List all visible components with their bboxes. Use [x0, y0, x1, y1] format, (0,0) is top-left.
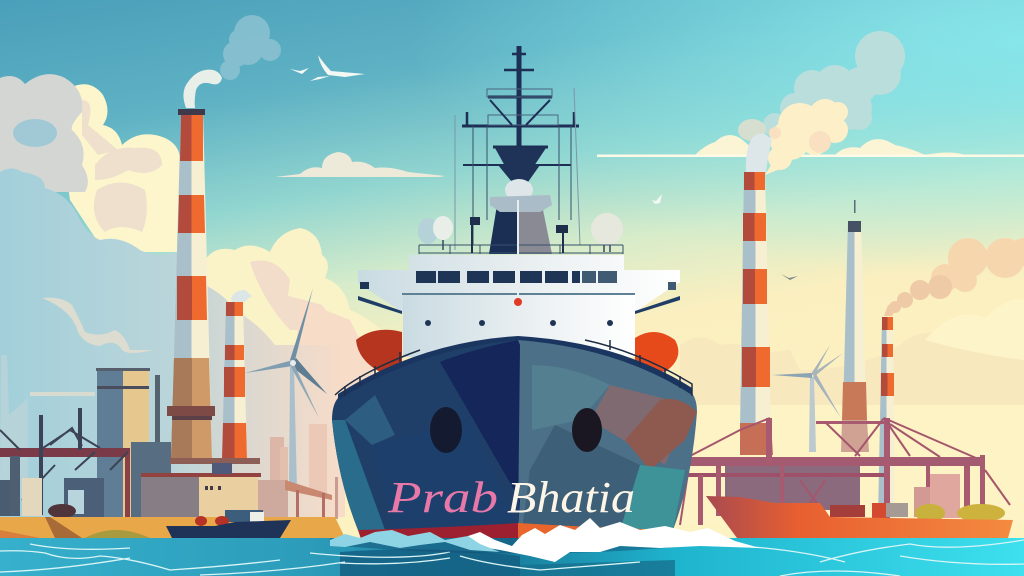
chimney: right small	[878, 317, 895, 520]
chimney: second left	[222, 302, 247, 460]
smoke: right chimney	[738, 31, 905, 175]
deck rails	[335, 340, 692, 396]
clouds: right strip	[597, 135, 1024, 157]
shore	[0, 517, 345, 538]
wisp cloud	[42, 298, 153, 353]
wing undersides	[358, 296, 680, 314]
boot topping	[358, 523, 673, 542]
sea	[0, 538, 1024, 576]
orange cargo ship	[706, 496, 1013, 538]
portholes	[425, 320, 613, 326]
signature: Prab Bhatia: Prab	[387, 473, 498, 522]
mast cone	[495, 148, 546, 182]
cloud shading: grey	[0, 74, 88, 192]
chimney: tall left	[167, 109, 215, 460]
smoke: left chimney	[183, 15, 281, 302]
anchor right	[572, 408, 602, 452]
distant left buildings	[0, 355, 327, 500]
storage tank	[96, 368, 150, 520]
clouds: right horizon	[680, 299, 1024, 525]
wind turbine: left	[245, 288, 327, 490]
right harbour gantry cranes	[680, 418, 1010, 525]
lifeboat: left	[356, 330, 402, 372]
red ball	[514, 298, 522, 306]
windows	[360, 271, 676, 290]
birds	[290, 55, 798, 280]
mast	[455, 46, 580, 250]
mast dome	[505, 179, 533, 201]
tower base	[489, 195, 552, 254]
lifeboat: right	[635, 332, 678, 372]
radar domes	[418, 213, 623, 252]
bridge deck	[358, 255, 680, 312]
distant left plant	[258, 477, 338, 520]
left gantry crane	[0, 408, 130, 518]
clouds: mid-left cream	[205, 228, 400, 430]
cloud: small centre	[275, 152, 445, 177]
lower superstructure	[403, 295, 635, 357]
signature: second word: Bhatia	[507, 473, 635, 522]
cloud shading: peach	[82, 100, 162, 232]
chimney: right tall	[740, 172, 773, 455]
wind turbine: right	[772, 345, 843, 452]
hull	[332, 336, 697, 540]
clouds: left blue bank	[0, 168, 345, 517]
sensor posts	[470, 217, 568, 253]
anchor left	[430, 407, 462, 453]
clouds: left cream bank	[0, 74, 180, 252]
smoke: small right chimney	[884, 238, 1024, 316]
small dark ship	[166, 510, 291, 538]
flag pole	[514, 200, 522, 336]
upper deck rail	[419, 245, 623, 254]
chimney: right slender	[841, 200, 869, 452]
main ship	[332, 46, 697, 542]
bow foam	[330, 518, 760, 562]
left industrial building	[64, 375, 261, 517]
